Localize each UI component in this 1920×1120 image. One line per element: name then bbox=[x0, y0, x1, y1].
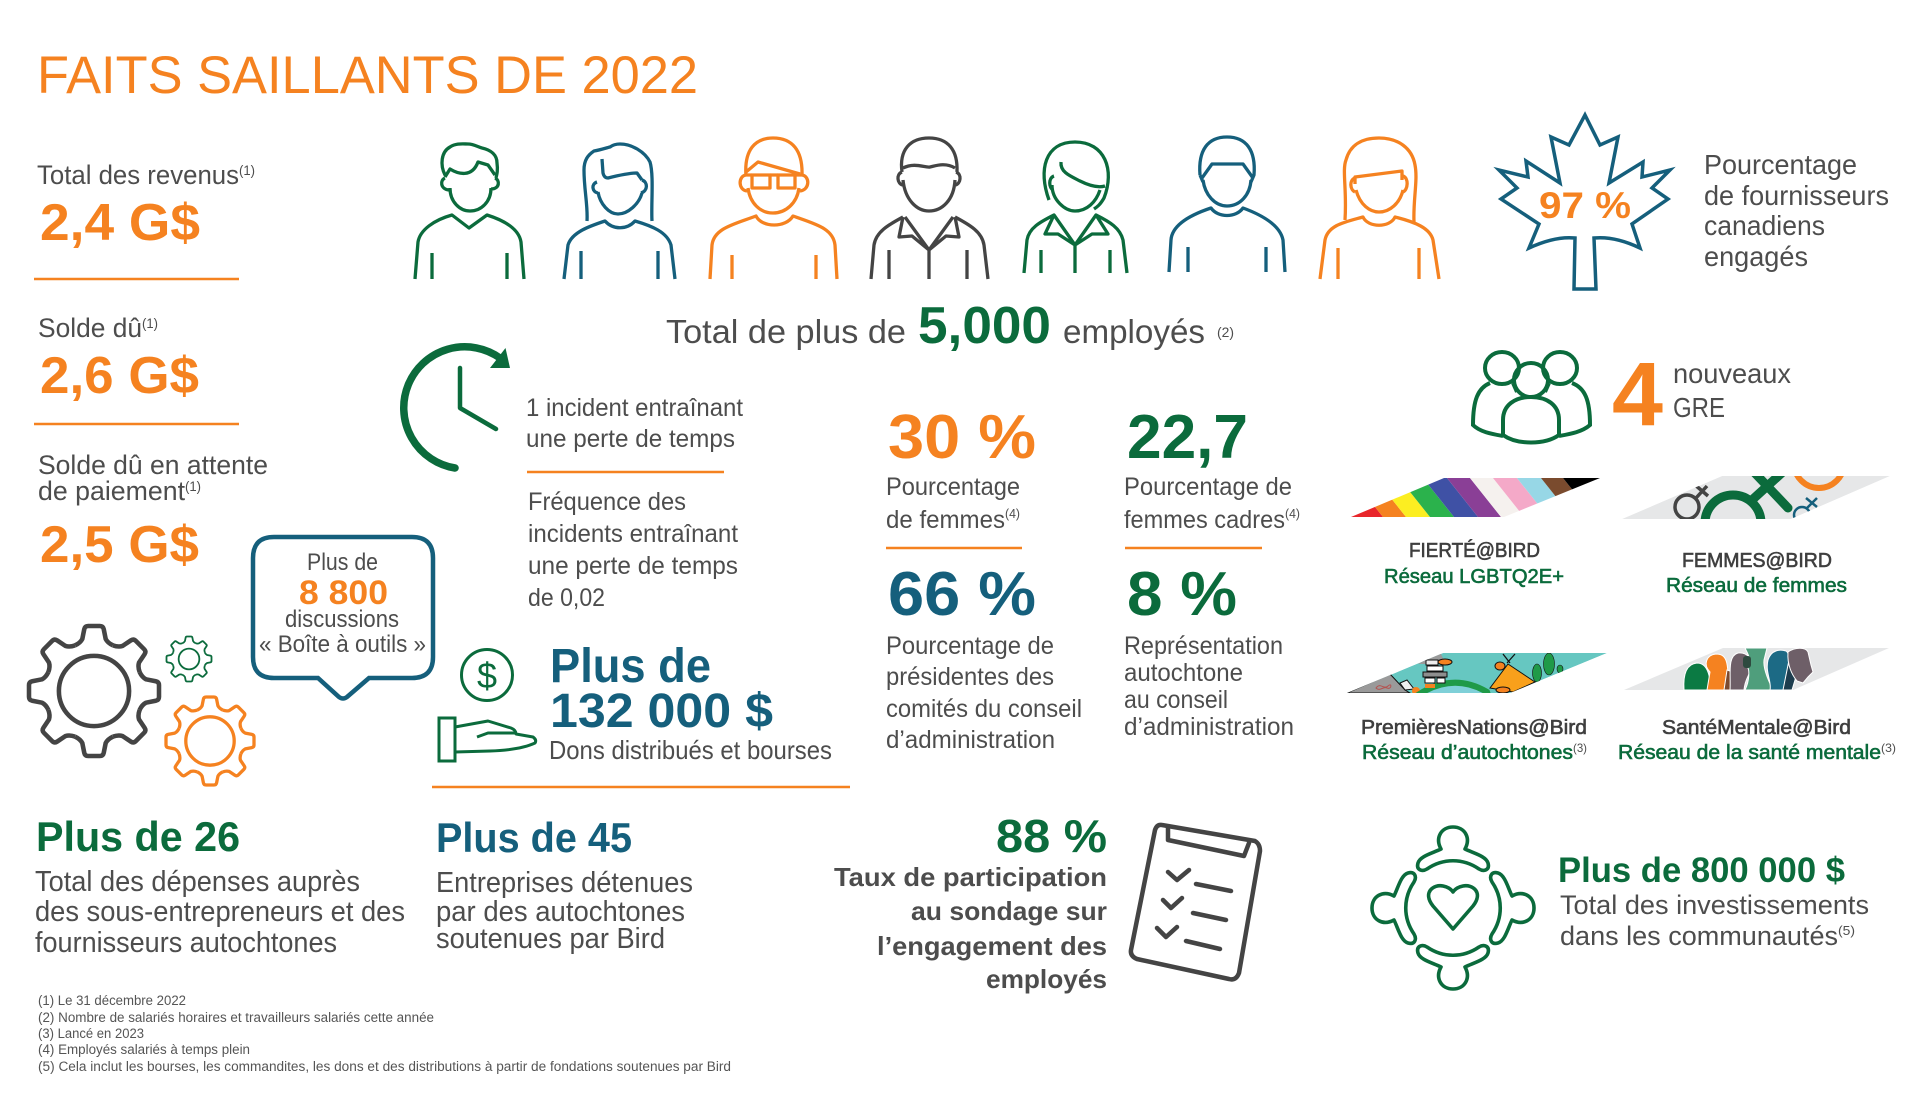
network: fierte bbox=[1384, 539, 1564, 588]
stat: dons bbox=[549, 640, 832, 765]
icon: clipboard bbox=[1131, 825, 1260, 979]
stat: 8 percent: au conseil bbox=[1124, 686, 1228, 714]
banner: pride bbox=[1351, 478, 1600, 517]
text: fournisseurs canadiens: Pourcentage bbox=[1704, 149, 1857, 180]
stat: solde du bbox=[38, 313, 199, 405]
stat: plus de 45: Entreprises détenues bbox=[436, 867, 693, 899]
callout: boite a outils: « Boîte à outils » bbox=[259, 631, 426, 658]
text: fournisseurs canadiens: engagés bbox=[1704, 241, 1808, 272]
headline: employes: (2) bbox=[1217, 324, 1234, 340]
stat: 4 nouveaux GRE: 4 bbox=[1612, 345, 1663, 445]
stat: 8 percent: 8 % bbox=[1127, 560, 1237, 629]
stat: plus de 26: des sous-entrepreneurs et des bbox=[35, 896, 405, 928]
network: femmes bbox=[1666, 550, 1847, 597]
icon: group of people bbox=[1473, 352, 1590, 442]
text: frequence: Fréquence des bbox=[528, 488, 686, 516]
stat: solde du en attente: 2,5 G$ bbox=[40, 516, 199, 574]
stat: solde du en attente: Solde dû en attente bbox=[38, 450, 268, 480]
stat: 22,7: Pourcentage de bbox=[1124, 473, 1292, 501]
stat: 8 percent: autochtone bbox=[1124, 659, 1243, 687]
headline: employes: 5,000 bbox=[918, 297, 1051, 355]
stat: 30 percent: de femmes bbox=[886, 506, 1005, 534]
stat: plus de 26: Total des dépenses auprès bbox=[35, 866, 360, 898]
headline: employes bbox=[666, 297, 1234, 355]
network: sante mentale: SantéMentale@Bird bbox=[1662, 717, 1851, 739]
stat: total des revenus bbox=[37, 160, 255, 252]
stat: solde du en attente bbox=[38, 450, 268, 574]
text: fournisseurs canadiens: de fournisseurs bbox=[1704, 180, 1889, 211]
icon: dollar and hand: $ bbox=[477, 655, 497, 696]
stat: solde du: (1) bbox=[142, 315, 158, 331]
stat: dons: Dons distribués et bourses bbox=[549, 735, 832, 765]
text: frequence: incidents entraînant bbox=[528, 520, 738, 548]
network: sante mentale: Réseau de la santé mentale bbox=[1618, 742, 1881, 764]
stat: investissements: Total des investissements bbox=[1560, 890, 1869, 920]
text: frequence bbox=[528, 488, 738, 612]
icon: maple leaf 97 percent bbox=[1499, 115, 1670, 289]
footnotes bbox=[38, 993, 731, 1074]
text: incident bbox=[526, 394, 743, 453]
title: FAITS SAILLANTS DE 2022 bbox=[37, 46, 698, 105]
icon: person teal short hair bbox=[1169, 137, 1285, 272]
stat: solde du: 2,6 G$ bbox=[40, 347, 199, 405]
headline: employes: employés bbox=[1063, 313, 1205, 350]
stat: 30 percent: 30 % bbox=[888, 403, 1036, 472]
callout: boite a outils bbox=[253, 537, 433, 698]
icon: person orange glasses bbox=[710, 138, 837, 279]
stat: plus de 45 bbox=[436, 814, 693, 955]
stat: solde du: Solde dû bbox=[38, 313, 142, 343]
icon: maple leaf 97 percent: 97 % bbox=[1539, 185, 1631, 226]
network: fierte: FIERTÉ@BIRD bbox=[1409, 539, 1540, 562]
stat: 88 percent bbox=[834, 810, 1107, 994]
callout: boite a outils: Plus de bbox=[307, 549, 378, 576]
network: premieres nations: (3) bbox=[1573, 741, 1587, 755]
icon: clock bbox=[404, 347, 510, 468]
text: fournisseurs canadiens: canadiens bbox=[1704, 210, 1825, 241]
stat: 88 percent: au sondage sur bbox=[911, 896, 1107, 926]
stat: solde du en attente: de paiement bbox=[38, 476, 185, 506]
footnotes: (2) Nombre de salariés horaires et travailleurs salariés cette année bbox=[38, 1010, 434, 1025]
icon: dollar and hand bbox=[439, 650, 536, 761]
stat: 8 percent: d’administration bbox=[1124, 713, 1294, 741]
stat: 22,7: (4) bbox=[1285, 506, 1300, 521]
banner: indigenous art bbox=[1347, 653, 1606, 693]
stat: investissements: Plus de 800 000 $ bbox=[1558, 851, 1845, 890]
stat: 66 percent: présidentes des bbox=[886, 663, 1054, 691]
footnotes: (3) Lancé en 2023 bbox=[38, 1026, 144, 1041]
text: incident: une perte de temps bbox=[526, 425, 735, 453]
icon: person green suit bbox=[1024, 142, 1127, 273]
stat: 66 percent: d’administration bbox=[886, 726, 1055, 754]
stat: dons: 132 000 $ bbox=[550, 685, 773, 738]
callout: boite a outils: 8 800 bbox=[299, 574, 388, 612]
banner: mental health heads bbox=[1624, 648, 1889, 690]
network: premieres nations: Réseau d’autochtones bbox=[1362, 742, 1573, 764]
stat: 30 percent: (4) bbox=[1005, 506, 1020, 521]
stat: 8 percent: Représentation bbox=[1124, 632, 1283, 660]
icon: person orange long hair bbox=[1320, 138, 1439, 279]
stat: investissements: dans les communautés bbox=[1560, 921, 1838, 951]
stat: 88 percent: employés bbox=[986, 964, 1107, 994]
text: frequence: de 0,02 bbox=[528, 584, 605, 612]
banner: women bbox=[1622, 476, 1890, 519]
stat: 66 percent: Pourcentage de bbox=[886, 632, 1054, 660]
callout: boite a outils: discussions bbox=[285, 606, 399, 633]
stat: 88 percent: l’engagement des bbox=[877, 931, 1107, 961]
stat: investissements bbox=[1558, 851, 1869, 951]
headline: employes: Total de plus de bbox=[666, 313, 906, 350]
text: incident: 1 incident entraînant bbox=[526, 394, 743, 422]
stat: 66 percent: comités du conseil bbox=[886, 695, 1082, 723]
network: sante mentale bbox=[1618, 717, 1896, 764]
stat: 22,7: femmes cadres bbox=[1124, 506, 1285, 534]
network: femmes: FEMMES@BIRD bbox=[1682, 550, 1832, 572]
icon: community heart bbox=[1372, 827, 1534, 989]
icon: person green bbox=[415, 144, 524, 279]
icon: person grey suit bbox=[871, 138, 988, 279]
icon: person teal bbox=[564, 144, 675, 279]
stat: 22,7: 22,7 bbox=[1127, 403, 1248, 472]
text: fournisseurs canadiens bbox=[1704, 149, 1889, 272]
stat: investissements: (5) bbox=[1838, 923, 1855, 938]
stat: 4 nouveaux GRE bbox=[1612, 345, 1791, 445]
network: fierte: Réseau LGBTQ2E+ bbox=[1384, 566, 1564, 588]
stat: plus de 45: par des autochtones bbox=[436, 896, 685, 928]
network: sante mentale: (3) bbox=[1881, 741, 1896, 755]
stat: solde du en attente: (1) bbox=[185, 478, 201, 494]
stat: 66 percent: 66 % bbox=[888, 560, 1036, 629]
stat: 66 percent bbox=[886, 560, 1082, 754]
network: premieres nations bbox=[1361, 717, 1587, 764]
stat: plus de 26: fournisseurs autochtones bbox=[35, 927, 337, 959]
stat: total des revenus: 2,4 G$ bbox=[40, 194, 200, 252]
text: frequence: une perte de temps bbox=[528, 552, 738, 580]
stat: 88 percent: 88 % bbox=[996, 810, 1107, 862]
stat: plus de 26: Plus de 26 bbox=[36, 813, 240, 860]
stat: total des revenus: Total des revenus bbox=[37, 160, 239, 190]
stat: 30 percent bbox=[886, 403, 1036, 534]
stat: plus de 26 bbox=[35, 813, 405, 959]
stat: 8 percent bbox=[1124, 560, 1294, 741]
stat: 30 percent: Pourcentage bbox=[886, 473, 1020, 501]
stat: plus de 45: soutenues par Bird bbox=[436, 923, 665, 955]
network: femmes: Réseau de femmes bbox=[1666, 575, 1847, 597]
stat: 22,7 bbox=[1124, 403, 1300, 534]
stat: plus de 45: Plus de 45 bbox=[436, 814, 632, 861]
footnotes: (1) Le 31 décembre 2022 bbox=[38, 993, 186, 1008]
icon: gears bbox=[29, 626, 254, 785]
stat: 4 nouveaux GRE: GRE bbox=[1673, 392, 1725, 423]
stat: dons: Plus de bbox=[550, 640, 711, 693]
stat: 4 nouveaux GRE: nouveaux bbox=[1673, 358, 1791, 389]
footnotes: (4) Employés salariés à temps plein bbox=[38, 1042, 250, 1057]
stat: 88 percent: Taux de participation bbox=[834, 862, 1107, 892]
footnotes: (5) Cela inclut les bourses, les commandites, les dons et des distributions à partir de fondations soutenues par Bird bbox=[38, 1059, 731, 1074]
network: premieres nations: PremièresNations@Bird bbox=[1361, 717, 1587, 739]
stat: total des revenus: (1) bbox=[239, 162, 255, 178]
